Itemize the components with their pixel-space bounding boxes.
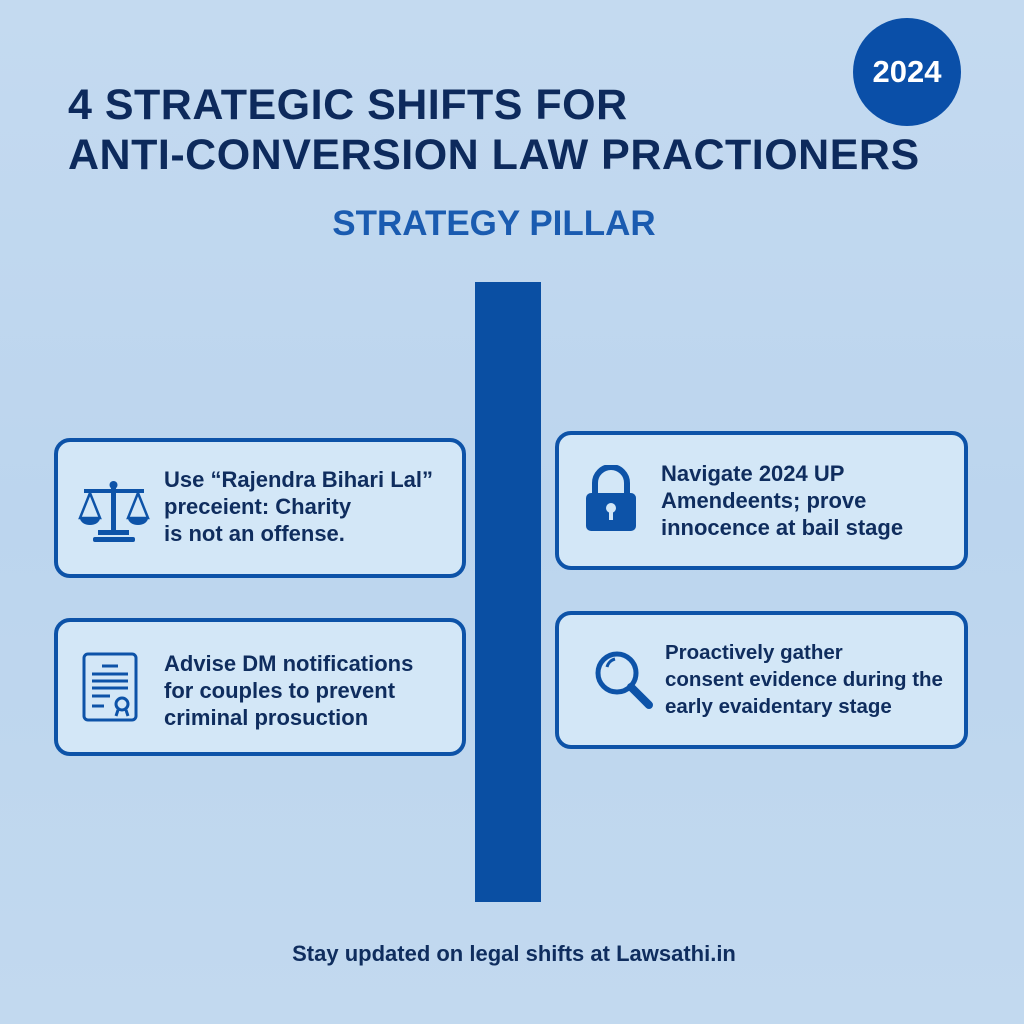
heading: strategy pillar: STRATEGY PILLAR [332,204,656,243]
pillar [475,282,541,902]
title [68,81,920,179]
text [164,651,413,730]
text: preceient: Charity [164,494,351,519]
text: early evaidentary stage [665,695,892,718]
text: criminal prosuction [164,705,368,730]
text: Use “Rajendra Bihari Lal” [164,467,433,492]
icon: magnifier [596,652,653,709]
text: innocence at bail stage [661,515,903,540]
icon: padlock [586,465,636,531]
text: is not an offense. [164,521,345,546]
text [665,641,943,718]
footer: Stay updated on legal shifts at Lawsathi.in [292,941,736,966]
badge: 2024: 2024 [873,54,941,89]
card: DM notifications [54,618,466,756]
text: Amendeents; prove [661,488,866,513]
text: Proactively gather [665,641,843,664]
card: Rajendra Bihari Lal [54,438,466,578]
title: 4 STRATEGIC SHIFTS FOR [68,81,628,129]
icon: document [82,652,138,722]
card: 2024 UP amendments [555,431,968,570]
text [661,461,903,540]
text [164,467,433,546]
text: Advise DM notifications [164,651,413,676]
text: consent evidence during the [665,668,943,691]
icon: scales [78,481,150,542]
badge: 2024 [853,18,961,126]
title: ANTI-CONVERSION LAW PRACTIONERS [68,131,920,179]
text: Navigate 2024 UP [661,461,844,486]
card: consent evidence [555,611,968,749]
text: for couples to prevent [164,678,395,703]
